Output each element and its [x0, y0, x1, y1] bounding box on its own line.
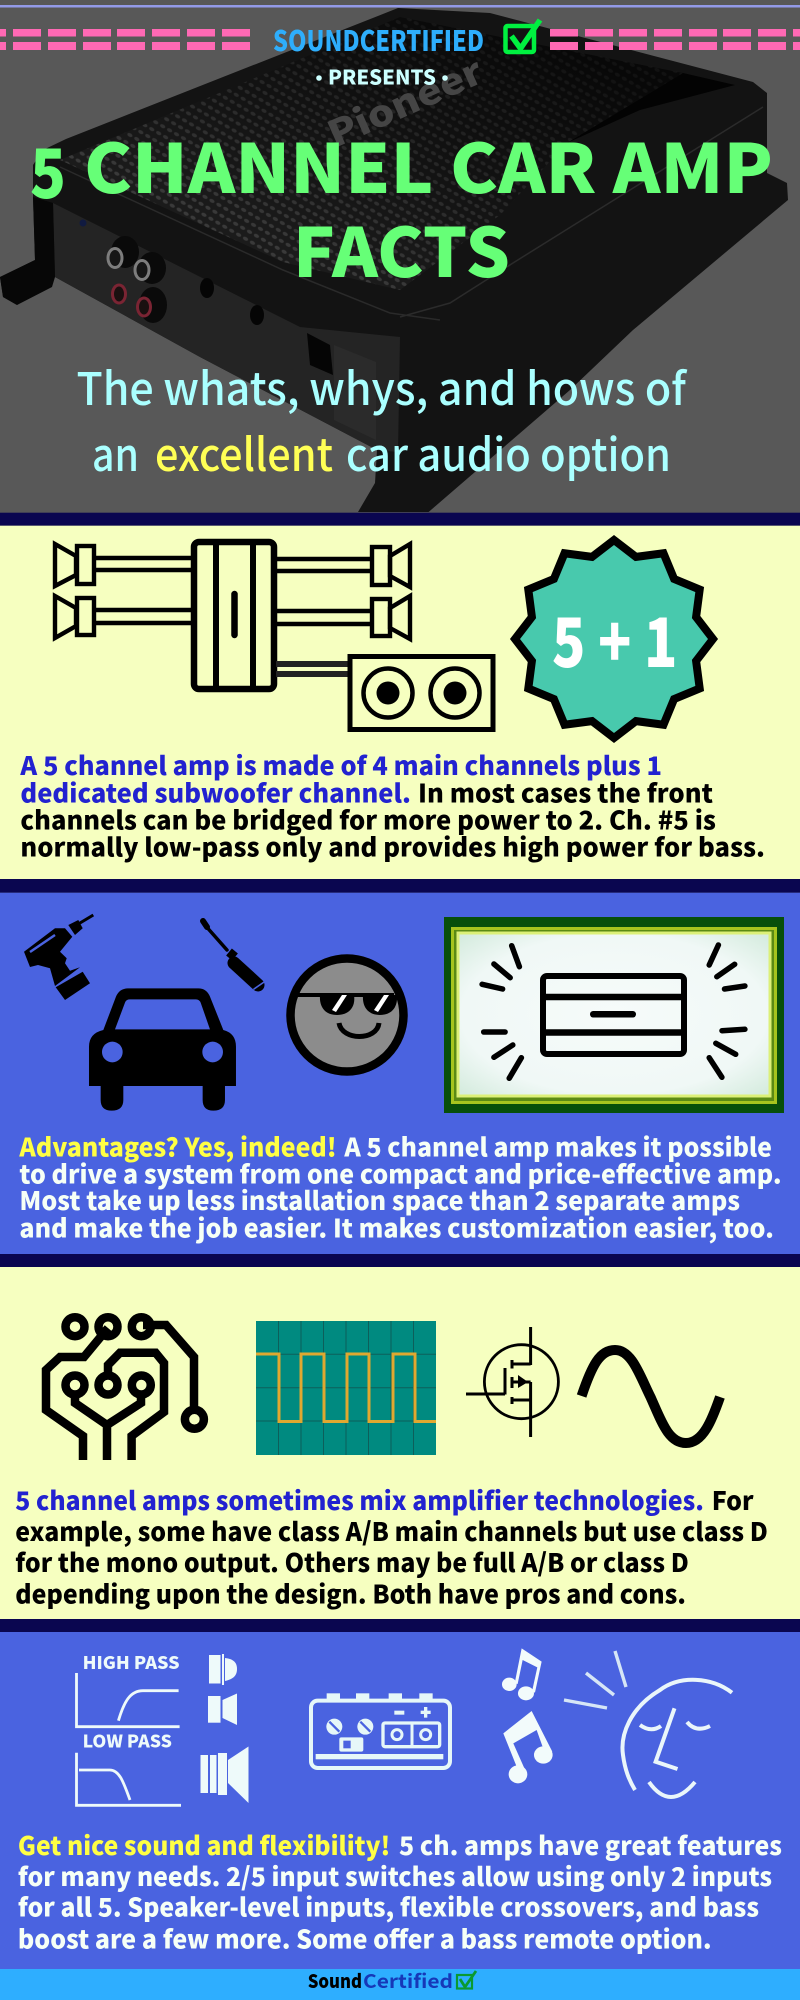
chart: high pass and low pass curves: HIGH PASS [83, 1650, 180, 1675]
text block: For [712, 1481, 754, 1518]
text block [18, 1826, 782, 1956]
title: CHANNEL CAR AMP [84, 114, 773, 213]
footer logo: Sound [308, 1967, 362, 1994]
text block [19, 746, 765, 865]
icon: music notes [502, 1648, 553, 1783]
text block: A 5 channel amp makes it possible [343, 1128, 772, 1165]
icon: listening face [564, 1651, 732, 1797]
badge: 5 + 1 [515, 540, 713, 738]
top rule [0, 5, 800, 8]
chart: high pass and low pass curves [76, 1650, 181, 1805]
panel: what it is [0, 513, 800, 879]
icon: cool face [290, 958, 404, 1072]
text block: Most take up less installation space than 2 separate amps [19, 1181, 740, 1218]
text block [18, 1128, 782, 1245]
subtitle: excellent [155, 419, 333, 484]
footer [0, 1967, 800, 2000]
text block: example, some have class A/B main channels but use class D [15, 1512, 768, 1549]
icon: drill [24, 915, 93, 1000]
title [30, 114, 773, 297]
icon: sine wave [582, 1350, 720, 1443]
pink dashes right [550, 29, 800, 50]
footer: Certified [363, 1967, 453, 1994]
title: 5 [30, 119, 66, 218]
presents label: PRESENTS [328, 62, 436, 90]
wiring diagram [55, 542, 493, 730]
text block: channels can be bridged for more power to 2. Ch. #5 is [20, 800, 716, 837]
subtitle [76, 353, 687, 484]
icon: screwdriver [203, 921, 267, 989]
panel: sound and flexibility [0, 1619, 800, 1969]
subtitle: The whats, whys, and hows of [76, 353, 687, 418]
panel: amplifier technologies [0, 1254, 800, 1619]
text block: dedicated subwoofer channel. [20, 773, 411, 810]
text block: Get nice sound and flexibility! [18, 1826, 390, 1863]
text block: for all 5. Speaker-level inputs, flexible crossovers, and bass [18, 1888, 759, 1925]
text block: to drive a system from one compact and price-effective amp. [19, 1154, 782, 1191]
title: FACTS [293, 198, 510, 297]
icon: circuit traces [46, 1317, 204, 1460]
panel: advantages [0, 879, 800, 1254]
text block: In most cases the front [418, 773, 713, 810]
text block: 5 ch. amps have great features [399, 1826, 782, 1863]
icon: mosfet symbol [466, 1327, 558, 1437]
chart: square wave on oscilloscope [256, 1321, 436, 1455]
text block: A 5 channel amp is made of 4 main channels plus 1 [19, 746, 662, 783]
icon: amplifier front panel [311, 1693, 450, 1768]
icon: footer check box [457, 1971, 476, 1988]
icon: green check box [506, 20, 540, 52]
pink dashes left [0, 29, 250, 50]
brand name: SOUNDCERTIFIED [273, 20, 484, 60]
text block: boost are a few more. Some offer a bass remote option. [18, 1919, 712, 1956]
badge: 5 + 1: 5 + 1 [552, 588, 678, 687]
chart: high pass and low pass curves: LOW PASS [83, 1728, 172, 1753]
framed amp picture [444, 917, 784, 1113]
amplifier background photo: Pioneer [318, 43, 491, 158]
subtitle: an [92, 419, 139, 484]
icon: speakers [200, 1654, 248, 1803]
text block: for many needs. 2/5 input switches allow using only 2 inputs [18, 1857, 772, 1894]
text block: Advantages? Yes, indeed! [18, 1128, 337, 1165]
icon: car [89, 988, 236, 1111]
header panel [0, 0, 800, 513]
subtitle: car audio option [346, 419, 671, 484]
text block [15, 1481, 768, 1611]
text block: 5 channel amps sometimes mix amplifier technologies. [15, 1481, 704, 1518]
amplifier [194, 542, 274, 689]
text block: normally low-pass only and provides high power for bass. [20, 828, 765, 865]
text block: and make the job easier. It makes customization easier, too. [19, 1208, 774, 1245]
text block: for the mono output. Others may be full A/B or class D [15, 1543, 689, 1580]
amplifier background photo [0, 8, 788, 512]
subwoofer box [350, 656, 493, 730]
text block: depending upon the design. Both have pros and cons. [15, 1574, 686, 1611]
